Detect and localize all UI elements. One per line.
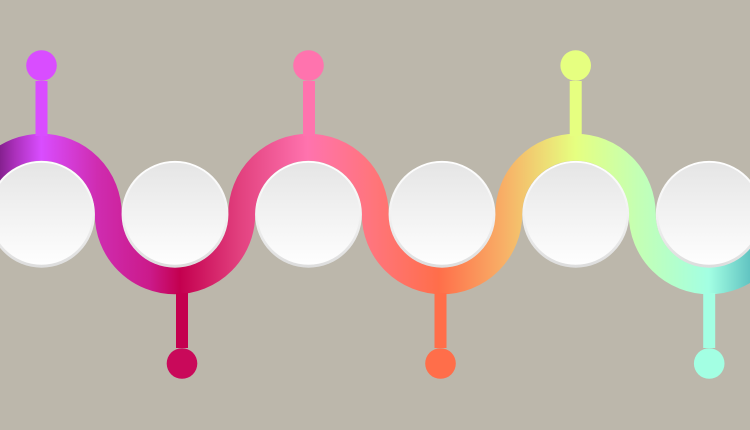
pin 5: yellow [560, 50, 591, 136]
disc 3 [255, 161, 362, 268]
disc 2 [122, 161, 228, 268]
pin 4: orange [425, 293, 456, 379]
disc 5 [522, 161, 629, 268]
pin 3: pink [293, 50, 324, 136]
disc 4 [389, 161, 495, 268]
pin 1: purple [26, 50, 57, 136]
pin 6: mint [694, 293, 724, 379]
pin 2: crimson [167, 293, 197, 379]
disc 1 [0, 161, 95, 268]
wave ribbon [0, 147, 750, 281]
disc 6 [656, 161, 750, 268]
